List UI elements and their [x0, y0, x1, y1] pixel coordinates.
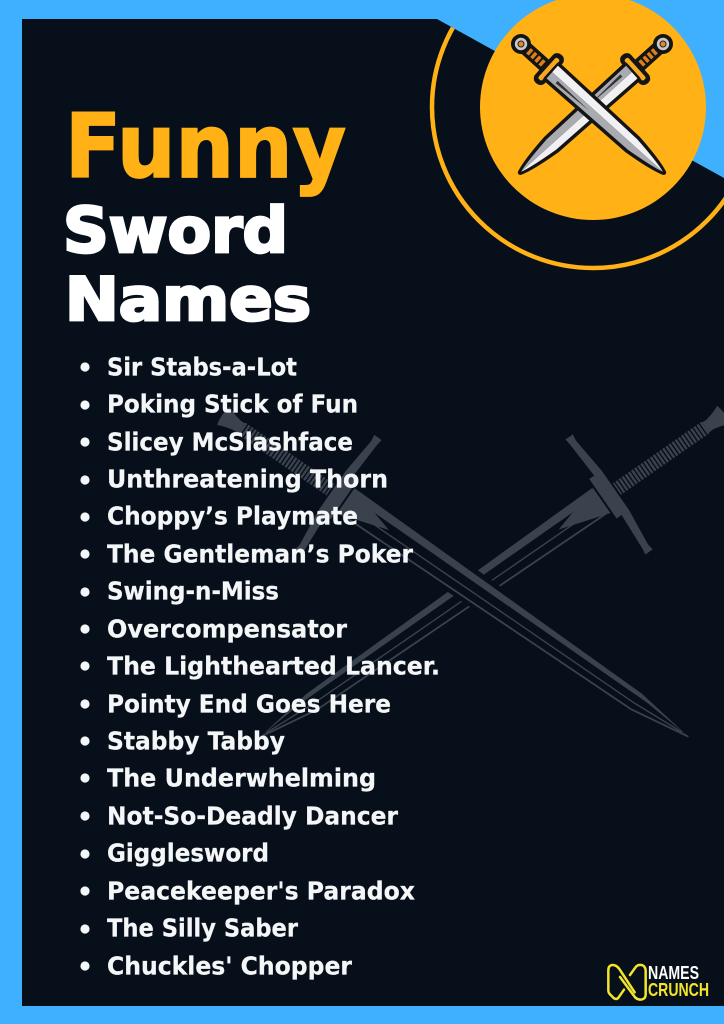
list of sword names: Chuckles' Chopper — [107, 952, 353, 980]
list of sword names: Pointy End Goes Here — [107, 690, 391, 718]
list of sword names: Peacekeeper's Paradox — [107, 876, 415, 906]
logo: Names Crunch — [608, 963, 709, 1000]
list of sword names: Choppy’s Playmate — [107, 502, 358, 530]
list of sword names: Sir Stabs-a-Lot — [107, 352, 297, 382]
title: Sword — [63, 194, 288, 267]
logo: Names Crunch: CRUNCH — [648, 980, 709, 1000]
logo: Names Crunch: NAMES — [648, 963, 699, 983]
icon: orange circle with crossed swords — [480, 0, 706, 220]
title: Funny — [65, 95, 346, 198]
list of sword names: The Underwhelming — [107, 764, 376, 792]
orange ring — [432, 0, 724, 268]
title: Names — [65, 265, 311, 335]
list of sword names: Not-So-Deadly Dancer — [107, 802, 399, 830]
list of sword names: Swing-n-Miss — [107, 576, 279, 606]
list of sword names: Stabby Tabby — [107, 726, 285, 756]
title — [63, 95, 346, 335]
list of sword names: The Lighthearted Lancer. — [107, 652, 440, 680]
list of sword names: The Gentleman’s Poker — [107, 540, 414, 568]
list of sword names: Gigglesword — [107, 838, 269, 868]
list of sword names: Slicey McSlashface — [107, 428, 353, 456]
list of sword names: Poking Stick of Fun — [107, 390, 358, 418]
list of sword names — [80, 352, 440, 980]
list of sword names: The Silly Saber — [107, 914, 299, 942]
list of sword names: Overcompensator — [107, 614, 348, 644]
decorative crossed swords watermark — [182, 357, 724, 795]
list of sword names: Unthreatening Thorn — [107, 464, 388, 494]
